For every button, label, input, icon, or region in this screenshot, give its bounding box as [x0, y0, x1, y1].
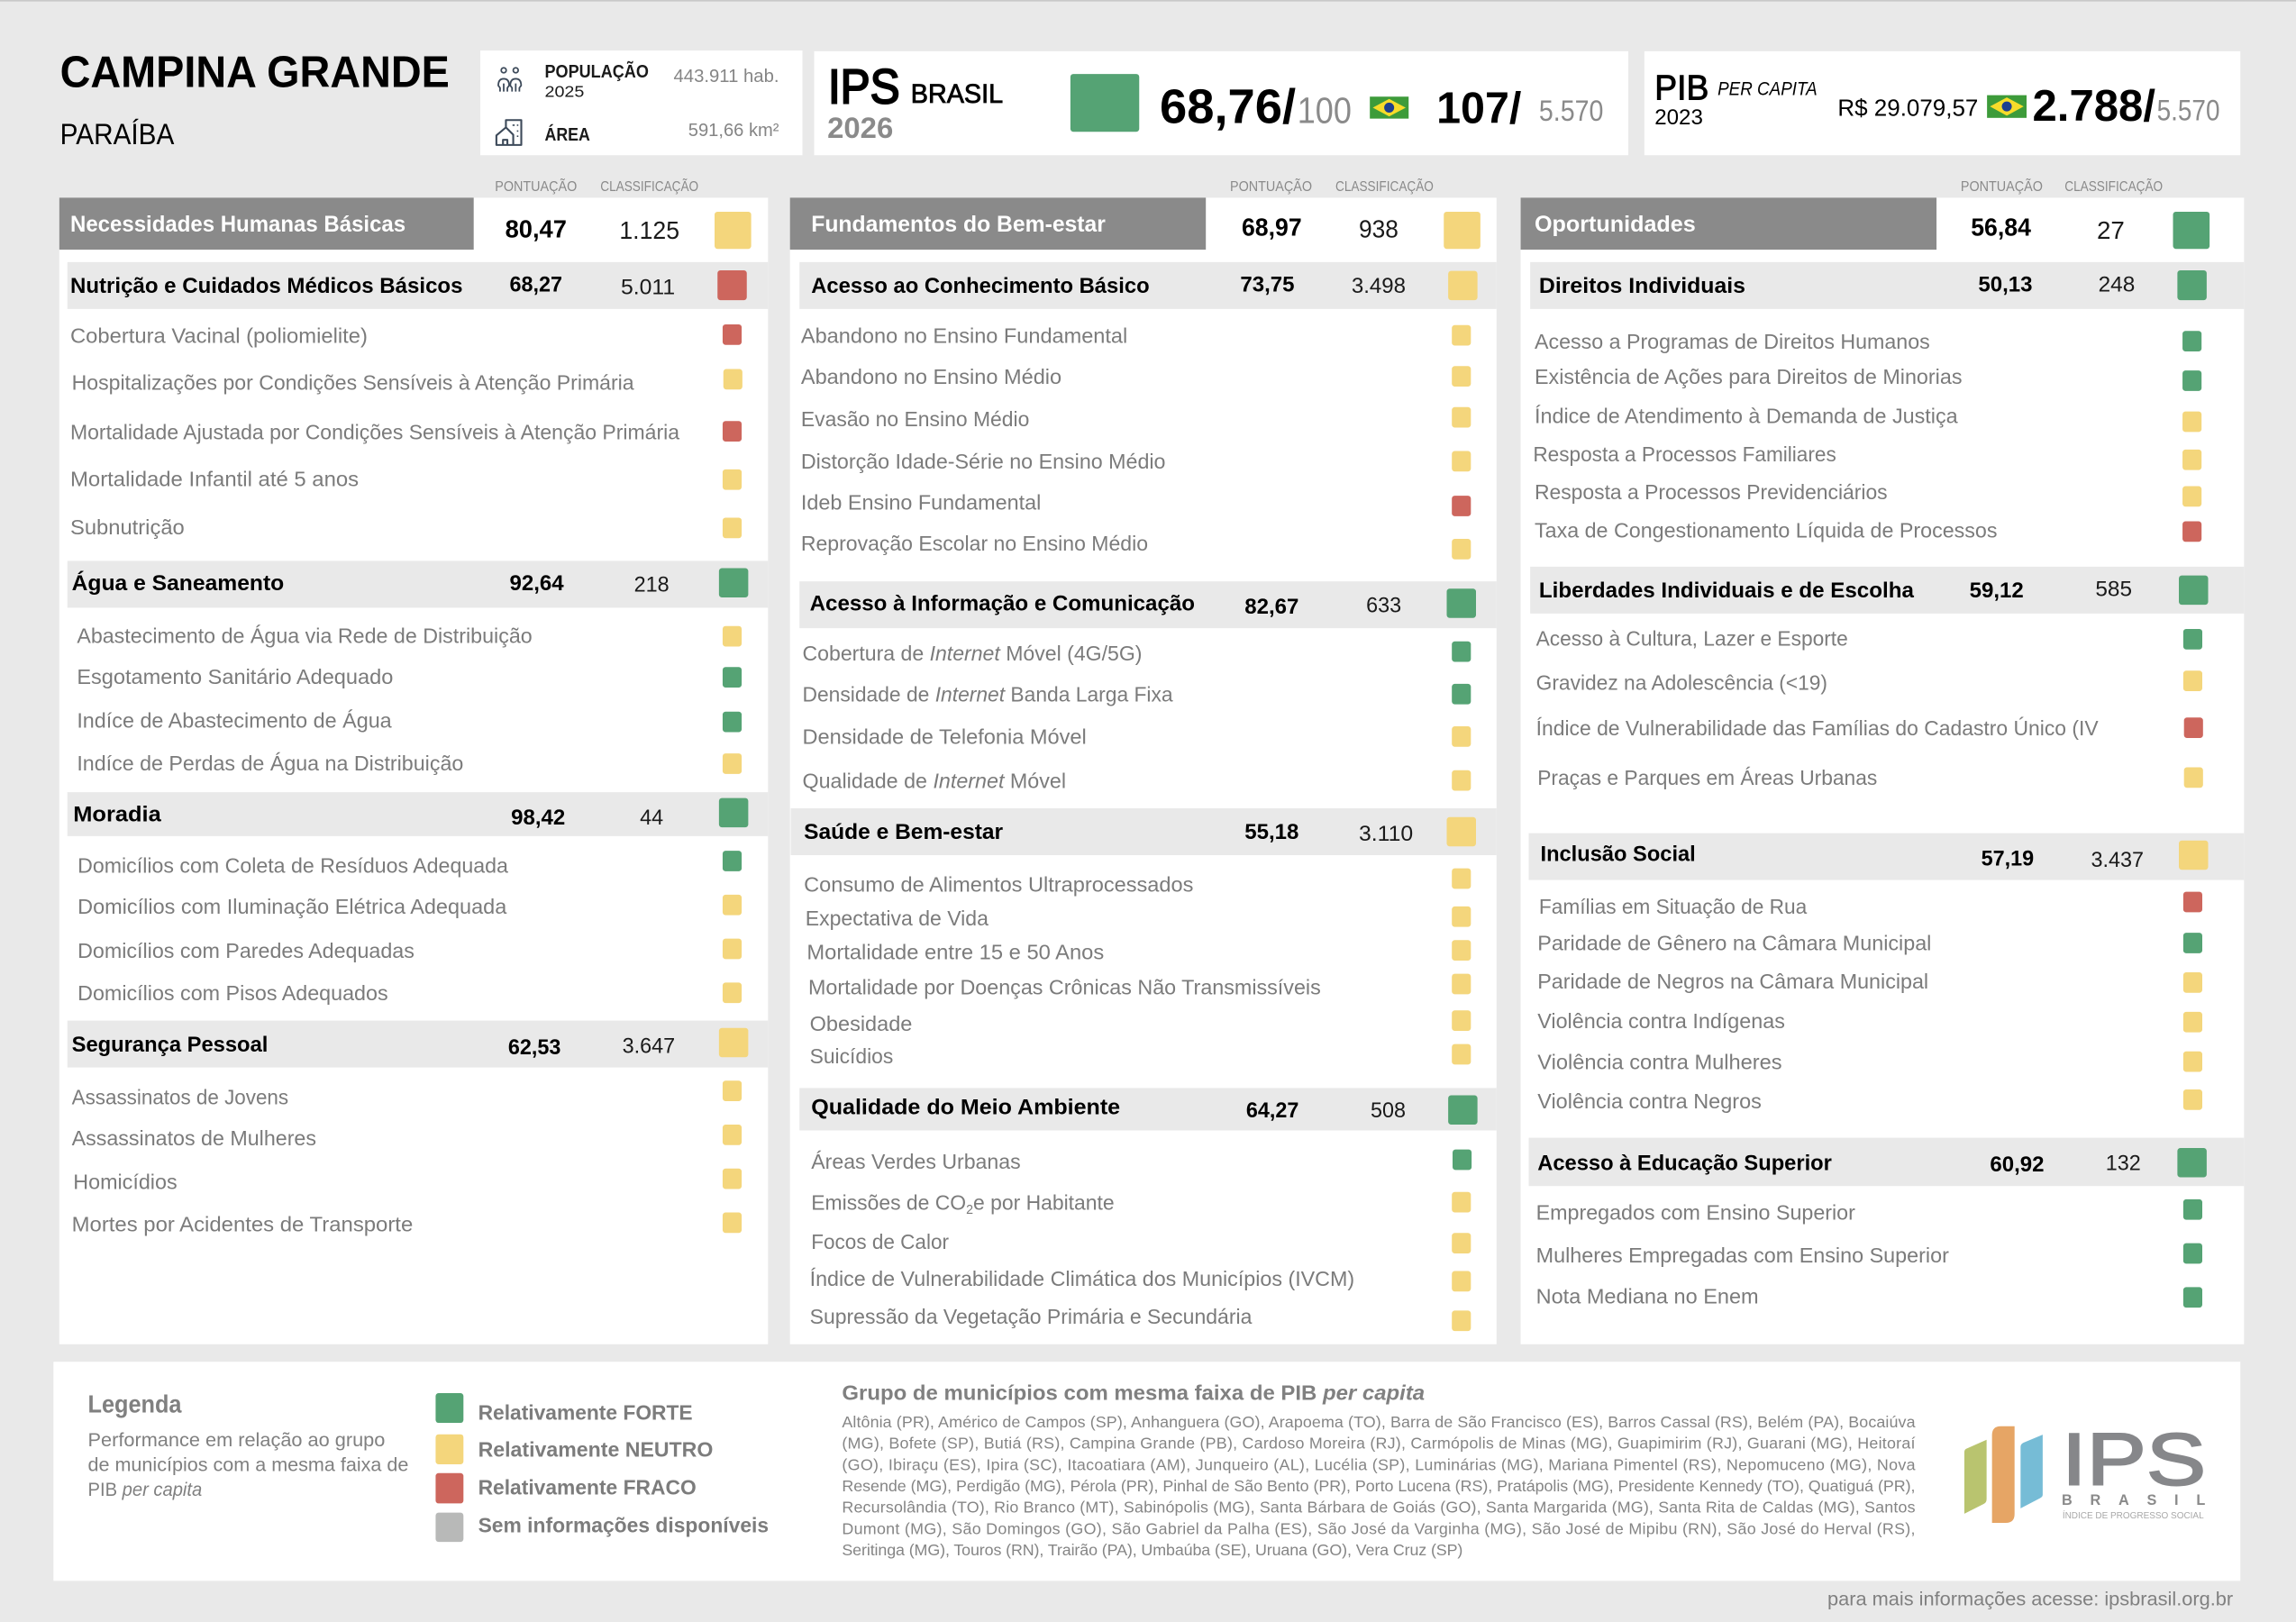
component: Moradia: 44 — [640, 806, 663, 830]
indicator: Situação de Rua — [1539, 892, 2202, 918]
indicator: Paredes Adequadas: Domicílios com Paredes Adequadas — [77, 939, 415, 962]
per capita label: PER CAPITA — [1717, 79, 1818, 100]
component: Acesso à Informação e Comunicação: 82,67 — [1244, 595, 1298, 619]
legend: neutro — [435, 1435, 713, 1464]
year: 2026 — [827, 112, 893, 144]
legend: sem informações: Sem informações disponíveis — [478, 1514, 769, 1537]
panel: legend and municipality group — [53, 1362, 2240, 1581]
indicator: Nota Enem — [1536, 1284, 2202, 1308]
indicator: Reprovação Escolar — [801, 532, 1471, 560]
indicator: Cultura, Lazer — [1536, 627, 2202, 651]
indicator: Indíce de Perdas: Indíce de Perdas de Água na Distribuição — [77, 752, 463, 775]
indicator: Abandono Fundamental: Abandono no Ensino Fundamental — [801, 323, 1127, 347]
icon: Brazilian flag — [1370, 96, 1408, 119]
component: Liberdades Individuais e de Escolha: Liberdades Individuais e de Escolha — [1539, 579, 1914, 603]
component: Segurança Pessoal: 62,53 — [508, 1035, 560, 1060]
logo: IPS Brasil: IPS — [2062, 1418, 2206, 1500]
indicator: Paridade de Negros: Paridade de Negros na Câmara Municipal — [1537, 970, 1928, 993]
indicator: Programas de Direitos Humanos: Acesso a Programas de Direitos Humanos — [1535, 330, 1930, 353]
ranking: 107/ — [1436, 85, 1522, 133]
indicator: Cobertura Vacinal — [70, 323, 742, 347]
column labels: CLASSIFICAÇÃO — [2064, 179, 2163, 195]
indicator: Emissões de CO2e: 2 — [966, 1203, 973, 1217]
indicator: Direitos de Minorias — [1535, 365, 2201, 391]
indicator: Iluminação Elétrica — [77, 895, 742, 918]
indicator: Paridade de Gênero — [1537, 932, 2202, 955]
indicator: Indíce de Abastecimento — [77, 709, 742, 733]
legend: fraco — [435, 1473, 697, 1503]
component: Inclusão Social: 57,19 — [1982, 846, 2034, 870]
component: Moradia — [68, 792, 768, 836]
indicator: Suicídios — [810, 1044, 1471, 1068]
indicator: Assassinatos de Jovens — [72, 1080, 742, 1108]
component: Segurança Pessoal: 3.647 — [623, 1034, 675, 1058]
indicator: Abastecimento de Água — [77, 624, 742, 647]
indicator: Abandono Médio — [801, 365, 1471, 388]
dimension header — [1521, 197, 2209, 250]
dimension header — [59, 197, 752, 250]
indicator: Violência Negros — [1537, 1089, 2202, 1113]
indicator: Mortalidade 15-50 — [806, 940, 1471, 963]
legend: forte: Relativamente FORTE — [478, 1400, 693, 1424]
icon: people — [498, 68, 521, 92]
indicator: Banda Larga — [802, 682, 1471, 706]
indicator: Cultura, Lazer: Acesso à Cultura, Lazer e Esporte — [1536, 627, 1848, 651]
indicator: Homicídios — [73, 1169, 742, 1194]
indicator: Iluminação Elétrica: Domicílios com Iluminação Elétrica Adequada — [77, 895, 507, 918]
dimension header: 27 — [2097, 216, 2125, 244]
title: municipality and state — [60, 49, 450, 150]
Brasil heading: BRASIL — [911, 80, 1003, 109]
panel: population and area — [480, 50, 802, 155]
group municipality list: Recursolândia (TO), Rio Branco (MT), Sabinópolis (MG), Santa Bárbara de Goiás (GO), Santa Margarida (MG), Santa Rita de Caldas (MG), Santos — [842, 1499, 1916, 1517]
logo: IPS Brasil — [1964, 1418, 2206, 1523]
indicator: Focos de Calor — [811, 1230, 1471, 1253]
component: Qualidade do Meio Ambiente: 64,27 — [1246, 1098, 1298, 1123]
dimension header: 80,47 — [506, 214, 567, 242]
area label: ÁREA — [544, 124, 590, 145]
component: Nutrição e Cuidados Médicos Básicos: 5.011 — [621, 276, 675, 300]
indicator: Esgotamento Sanitário — [77, 665, 742, 688]
indicator: Violência Negros: Violência contra Negros — [1537, 1089, 1762, 1113]
indicator: Emissões de CO2e: Emissões de CO — [811, 1190, 970, 1214]
title: municipality and state: CAMPINA GRANDE — [60, 49, 450, 97]
indicator: Banda Larga: Densidade de Internet Banda Larga Fixa — [802, 682, 1173, 706]
legend description — [88, 1430, 408, 1500]
indicator: Obesidade — [810, 1010, 1471, 1035]
component: Inclusão Social: Inclusão Social — [1541, 843, 1696, 867]
component: Segurança Pessoal: Segurança Pessoal — [72, 1033, 268, 1057]
indicator: Expectativa de Vida — [806, 907, 1471, 930]
indicator: Focos de Calor: Focos de Calor — [811, 1230, 949, 1253]
component: Liberdades Individuais e de Escolha — [1530, 567, 2244, 614]
year: 2023 — [1654, 105, 1703, 130]
component: Qualidade do Meio Ambiente: 508 — [1371, 1098, 1406, 1123]
component: Direitos Individuais: Direitos Individuais — [1539, 274, 1745, 298]
indicator: Telefonia Móvel: Densidade de Telefonia Móvel — [802, 725, 1087, 749]
indicator: Abandono Médio: Abandono no Ensino Médio — [801, 365, 1061, 388]
indicator: Processos Familiares — [1533, 442, 2201, 470]
indicator: Qualidade de Internet — [802, 769, 1471, 792]
indicator: Paridade de Negros — [1537, 970, 2202, 993]
indicator: Processos Previdenciários — [1535, 480, 2201, 506]
score: 68,76/ — [1160, 80, 1296, 134]
indicator: Coleta de Resíduos: Domicílios com Coleta de Resíduos Adequada — [77, 854, 509, 878]
component: Água e Saneamento: 92,64 — [510, 571, 564, 596]
legend: neutro: Relativamente NEUTRO — [478, 1438, 713, 1462]
legend: forte — [435, 1393, 693, 1424]
dimension header — [790, 197, 1481, 250]
dimension header: Oportunidades — [1535, 212, 1696, 237]
indicator: Paredes Adequadas — [77, 939, 742, 962]
component: Inclusão Social: 3.437 — [2091, 848, 2144, 872]
indicator: Expectativa de Vida: Expectativa de Vida — [806, 907, 989, 930]
component: Acesso à Informação e Comunicação — [799, 581, 1497, 628]
status swatch — [1071, 74, 1139, 132]
logo: IPS Brasil: BRASIL — [2062, 1492, 2205, 1508]
indicator: Violência Mulheres: Violência contra Mulheres — [1537, 1050, 1782, 1073]
indicator: Ideb: Ideb Ensino Fundamental — [801, 491, 1041, 515]
component: Acesso à Educação Superior: 60,92 — [1990, 1153, 2044, 1177]
component: Saúde e Bem-estar: 3.110 — [1359, 822, 1413, 846]
indicator: Mortalidade Ajustada: Mortalidade Ajustada por Condições Sensíveis à Atenção Primária — [70, 421, 680, 444]
component: Acesso ao Conhecimento Básico: 3.498 — [1352, 274, 1406, 298]
indicator: Áreas Verdes: Áreas Verdes Urbanas — [811, 1150, 1021, 1173]
dimension header: Necessidades Humanas Básicas — [70, 212, 405, 237]
indicator: Gravidez — [1536, 670, 2202, 694]
dimension header: 68,97 — [1242, 214, 1302, 241]
component: Acesso à Informação e Comunicação: Acesso à Informação e Comunicação — [810, 592, 1195, 616]
component: Segurança Pessoal — [68, 1021, 768, 1068]
component: Acesso ao Conhecimento Básico: Acesso ao Conhecimento Básico — [811, 274, 1150, 298]
indicator: Distorção Idade-Série — [801, 450, 1471, 473]
indicator: Ideb — [801, 491, 1471, 516]
component: Qualidade do Meio Ambiente — [799, 1088, 1497, 1131]
component: Direitos Individuais: 248 — [2099, 272, 2135, 296]
indicator: Homicídios: Homicídios — [73, 1171, 178, 1194]
column labels: PONTUAÇÃO — [495, 179, 577, 195]
component: Nutrição e Cuidados Médicos Básicos — [68, 262, 768, 309]
component: Água e Saneamento: Água e Saneamento — [72, 570, 284, 596]
dimension header: Fundamentos do Bem-estar — [811, 212, 1106, 237]
indicator: Mulheres Empregadas: Mulheres Empregadas com Ensino Superior — [1536, 1244, 1949, 1267]
indicator: Qualidade de Internet: Qualidade de Internet Móvel — [802, 769, 1066, 792]
indicator: Assassinatos de Jovens: Assassinatos de Jovens — [72, 1085, 288, 1108]
indicator: Supressão da Vegetação — [810, 1305, 1471, 1331]
column labels: PONTUAÇÃO — [1961, 179, 2043, 195]
indicator: Processos Previdenciários: Resposta a Processos Previdenciários — [1535, 480, 1888, 504]
value: R$ 29.079,57 — [1837, 94, 1978, 121]
indicator: Pisos Adequados: Domicílios com Pisos Adequados — [77, 981, 388, 1005]
indicator: Indíce de Abastecimento: Indíce de Abastecimento de Água — [77, 709, 393, 733]
component: Liberdades Individuais e de Escolha: 59,12 — [1970, 579, 2024, 603]
indicator: Assassinatos de Mulheres: Assassinatos de Mulheres — [72, 1126, 316, 1150]
indicator: Mortalidade Infantil — [70, 468, 742, 491]
indicator: Praças e Parques: Praças e Parques em Áreas Urbanas — [1537, 766, 1877, 789]
indicator: Nota Enem: Nota Mediana no Enem — [1536, 1284, 1759, 1308]
indicator: Violência Mulheres — [1537, 1050, 2202, 1073]
indicator: Mortes por Acidentes — [72, 1213, 742, 1236]
component: Acesso à Informação e Comunicação: 633 — [1366, 593, 1401, 617]
indicator: Pisos Adequados — [77, 981, 742, 1005]
population value: 443.911 hab. — [674, 67, 779, 87]
component: Moradia: Moradia — [73, 803, 161, 827]
indicator: Emissões de CO2e — [811, 1190, 1471, 1217]
legend description: de municípios com a mesma faixa de — [88, 1454, 408, 1475]
indicator: Violência Indígenas: Violência contra Indígenas — [1537, 1009, 1785, 1033]
IPS heading: IPS — [828, 60, 900, 114]
component: Água e Saneamento: 218 — [634, 573, 670, 597]
indicator: Supressão da Vegetação: Supressão da Vegetação Primária e Secundária — [810, 1305, 1253, 1328]
indicator: Mortalidade 15-50: Mortalidade entre 15 e 50 Anos — [806, 940, 1104, 963]
indicator: Suicídios: Suicídios — [810, 1044, 893, 1068]
dimension header: 56,84 — [1971, 214, 2031, 241]
column labels — [495, 179, 698, 195]
indicator: Reprovação Escolar: Reprovação Escolar no Ensino Médio — [801, 532, 1148, 555]
column labels: PONTUAÇÃO — [1230, 179, 1312, 195]
indicator: Situação de Rua: Famílias em Situação de Rua — [1539, 895, 1808, 918]
indicator: Empregados Ensino Superior — [1536, 1199, 2202, 1225]
indicator: Ultraprocessados: Consumo de Alimentos Ultraprocessados — [804, 873, 1193, 897]
component: Acesso ao Conhecimento Básico: 73,75 — [1240, 272, 1295, 296]
panel: Necessidades Humanas Básicas — [59, 179, 768, 1344]
area value: 591,66 km² — [688, 121, 779, 141]
panel: Fundamentos do Bem-estar — [790, 179, 1497, 1344]
indicator: Emissões de CO2e: e por Habitante — [973, 1190, 1115, 1214]
indicator: Obesidade: Obesidade — [810, 1012, 912, 1035]
column labels: CLASSIFICAÇÃO — [1335, 179, 1434, 195]
component: Nutrição e Cuidados Médicos Básicos: 68,27 — [510, 272, 562, 296]
component: Acesso à Educação Superior — [1528, 1138, 2244, 1186]
indicator: Hospitalizações: Hospitalizações por Condições Sensíveis à Atenção Primária — [72, 370, 635, 394]
indicator: Telefonia Móvel — [802, 725, 1471, 749]
icon: Brazilian flag — [1987, 96, 2027, 118]
indicator: Cobertura de Internet — [802, 642, 1471, 665]
indicator: Paridade de Gênero: Paridade de Gênero na Câmara Municipal — [1537, 932, 1931, 955]
component: Nutrição e Cuidados Médicos Básicos: Nutrição e Cuidados Médicos Básicos — [70, 274, 463, 298]
group municipality list: (GO), Ibiraçu (ES), Ipira (SC), Itacoatiara (AM), Junqueiro (AL), Lucélia (SP), Luminárias (MG), Mariana Pimentel (RS), Nepomuceno (MG), Nova — [842, 1456, 1916, 1474]
ranking total: 5.570 — [2157, 94, 2220, 126]
PIB heading: PIB — [1654, 69, 1708, 108]
group municipality list: (MG), Bofete (SP), Butiá (RS), Campina Grande (PB), Cardoso Moreira (RJ), Carmópolis de Minas (MG), Guapimirim (RJ), Guarani (MG), Heitoraí — [842, 1435, 1916, 1453]
indicator: Demanda de Justiça: Índice de Atendimento à Demanda de Justiça — [1535, 405, 1959, 428]
ranking total: 5.570 — [1539, 95, 1603, 127]
indicator: Vulnerabilidade CadÚnico: Índice de Vulnerabilidade das Famílias do Cadastro Único (IV — [1536, 716, 2099, 740]
indicator: Subnutrição: Subnutrição — [70, 515, 185, 539]
indicator: Mulheres Empregadas — [1536, 1244, 2202, 1267]
indicator: Processos Familiares: Resposta a Processos Familiares — [1533, 442, 1836, 466]
panel: Oportunidades — [1521, 179, 2244, 1344]
indicator: Coleta de Resíduos — [77, 851, 742, 878]
column labels: CLASSIFICAÇÃO — [600, 179, 698, 195]
ranking: 2.788/ — [2033, 82, 2155, 131]
group municipality list: Seritinga (MG), Touros (RN), Trairão (PA), Umbaúba (SE), Uruana (GO), Vera Cruz (SP) — [842, 1541, 1462, 1559]
component: Direitos Individuais: 50,13 — [1978, 272, 2033, 296]
score max: 100 — [1298, 90, 1352, 132]
dimension header: 1.125 — [619, 216, 679, 244]
title: municipality and state: PARAÍBA — [60, 118, 175, 150]
indicator: Gravidez: Gravidez na Adolescência (<19) — [1536, 670, 1827, 694]
footer link text: para mais informações acesse: ipsbrasil.org.br — [1827, 1590, 2233, 1610]
component: Inclusão Social — [1528, 834, 2244, 880]
component: Acesso à Educação Superior: Acesso à Educação Superior — [1537, 1151, 1832, 1175]
group municipality list: Resende (MG), Perdigão (MG), Pérola (PR), Pinhal de São Bento (PR), Porto Lucena (RS), Pratápolis (MG), Presidente Kennedy (TO), Quatiguá (PR), — [842, 1477, 1916, 1495]
component: Acesso ao Conhecimento Básico — [799, 262, 1497, 309]
component: Qualidade do Meio Ambiente: Qualidade do Meio Ambiente — [811, 1096, 1120, 1120]
component: Acesso à Educação Superior: 132 — [2106, 1151, 2141, 1175]
indicator: Demanda de Justiça — [1535, 405, 2201, 432]
indicator: Abastecimento de Água: Abastecimento de Água via Rede de Distribuição — [77, 624, 533, 647]
indicator: Distorção Idade-Série: Distorção Idade-Série no Ensino Médio — [801, 450, 1166, 473]
logo: IPS Brasil: ÍNDICE DE PROGRESSO SOCIAL — [2063, 1509, 2204, 1521]
component: Saúde e Bem-estar — [791, 808, 1497, 855]
component: Direitos Individuais — [1530, 262, 2244, 309]
group municipality list: Altônia (PR), Américo de Campos (SP), Anhanguera (GO), Arapoema (TO), Barra de São Francisco (ES), Barros Cassal (RS), Belém (PA), Bocaiúva — [842, 1413, 1916, 1431]
indicator: IVCM: Índice de Vulnerabilidade Climática dos Municípios (IVCM) — [810, 1267, 1354, 1290]
legend heading: Legenda — [88, 1390, 182, 1417]
indicator: Áreas Verdes — [811, 1150, 1471, 1173]
indicator: Praças e Parques — [1537, 766, 2203, 789]
icon: building — [497, 120, 521, 145]
indicator: Evasão: Evasão no Ensino Médio — [801, 407, 1029, 431]
indicator: Indíce de Perdas — [77, 752, 742, 775]
dimension header: 938 — [1359, 214, 1399, 242]
indicator: Cobertura de Internet: Cobertura de Internet Móvel (4G/5G) — [802, 642, 1143, 665]
indicator: Subnutrição — [70, 515, 742, 539]
indicator: Programas de Direitos Humanos — [1535, 330, 2201, 353]
panel: PIB per capita — [1645, 51, 2240, 155]
population label: POPULAÇÃO — [544, 61, 649, 82]
indicator: Esgotamento Sanitário: Esgotamento Sanitário Adequado — [77, 665, 393, 688]
component: Saúde e Bem-estar: 55,18 — [1244, 820, 1298, 844]
group heading: Grupo de municípios com mesma faixa de PIB per capita — [842, 1381, 1425, 1405]
legend description: PIB per capita — [88, 1480, 202, 1500]
legend description: Performance em relação ao grupo — [88, 1430, 385, 1451]
indicator: Assassinatos de Mulheres — [72, 1125, 742, 1150]
component: Saúde e Bem-estar: Saúde e Bem-estar — [804, 820, 1004, 844]
indicator: Congestionamento: Taxa de Congestionamento Líquida de Processos — [1535, 518, 1997, 542]
indicator: Abandono Fundamental — [801, 323, 1471, 347]
indicator: Mortes por Acidentes: Mortes por Acidentes de Transporte — [72, 1213, 413, 1236]
indicator: Cobertura Vacinal: Cobertura Vacinal (poliomielite) — [70, 323, 368, 347]
indicator: Evasão — [801, 407, 1471, 431]
legend: sem informações — [435, 1513, 769, 1542]
column labels — [1230, 179, 1434, 195]
column labels — [1961, 179, 2163, 195]
component: Água e Saneamento — [68, 560, 768, 607]
group municipality list — [842, 1413, 1916, 1559]
indicator: Direitos de Minorias: Existência de Ações para Direitos de Minorias — [1535, 365, 1963, 388]
indicator: Mortalidade Infantil: Mortalidade Infantil até 5 anos — [70, 468, 359, 491]
group municipality list: Dumont (MG), São Domingos (GO), São Gabriel da Palha (ES), São José da Varginha (MG), São José de Mipibu (RN), São José do Herval (RS), — [842, 1519, 1916, 1537]
population year: 2025 — [544, 82, 584, 100]
indicator: Doenças Crônicas: Mortalidade por Doenças Crônicas Não Transmissíveis — [808, 975, 1321, 998]
legend: fraco: Relativamente FRACO — [478, 1476, 697, 1499]
panel: IPS Brasil score — [815, 51, 1628, 155]
indicator: Ultraprocessados — [804, 869, 1471, 897]
indicator: Empregados Ensino Superior: Empregados com Ensino Superior — [1536, 1201, 1855, 1225]
component: Moradia: 98,42 — [511, 806, 565, 830]
component: Liberdades Individuais e de Escolha: 585 — [2095, 577, 2132, 601]
indicator: Violência Indígenas — [1537, 1009, 2202, 1033]
